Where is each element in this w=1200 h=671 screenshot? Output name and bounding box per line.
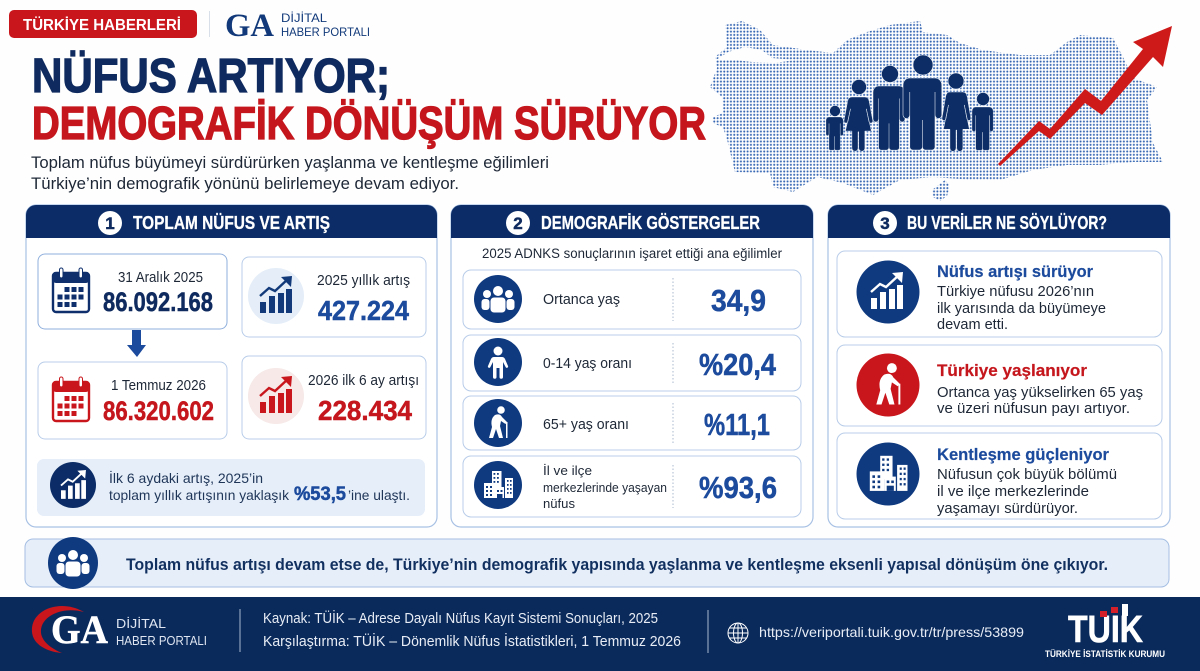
row: 0-14 age share: 0-14 yaş oranı — [543, 356, 632, 372]
card: Türkiye is ageing: Türkiye yaşlanıyor — [937, 361, 1087, 380]
footer GA logo: DİJİTAL — [116, 616, 166, 631]
footer GA logo: GA — [51, 607, 108, 652]
callout: share of annual growth: İlk 6 aydaki artış, 2025’in — [109, 469, 263, 486]
card: 2026 first six months growth: 2026 ilk 6 ay artışı — [308, 373, 419, 389]
category badge: TÜRKİYE HABERLERİ — [23, 15, 181, 34]
row: province and district centres: %93,6 — [699, 470, 777, 505]
card: 2025 annual growth: 2025 yıllık artış — [317, 273, 410, 289]
card: 2025 annual growth — [242, 257, 426, 337]
card: 31 Aralık 2025 population: 86.092.168 — [103, 287, 213, 317]
card: urbanisation strengthens — [837, 433, 1162, 519]
panel 2 heading: 2 — [513, 214, 523, 233]
callout: share of annual growth: toplam yıllık artışının yaklaşık — [109, 487, 290, 503]
card: 31 Aralık 2025 population — [38, 254, 227, 329]
row: median age — [463, 270, 801, 329]
source url: https://veriportali.tuik.gov.tr/tr/press/53899 — [759, 624, 1024, 640]
card: urbanisation strengthens: Kentleşme güçleniyor — [937, 445, 1109, 464]
card: 2026 first six months growth — [242, 356, 426, 439]
subtitle — [31, 153, 549, 193]
TÜİK logo: TÜİK — [1068, 608, 1143, 651]
dotted map of Türkiye — [710, 21, 1163, 201]
title — [32, 50, 706, 149]
subtitle: Türkiye’nin demografik yönünü belirlemeye devam ediyor. — [31, 174, 459, 193]
top brand bar — [9, 8, 370, 44]
panel: bu veriler ne söylüyor — [828, 205, 1170, 527]
panel 1 heading: 1 — [105, 214, 115, 233]
card: Türkiye is ageing: Ortanca yaş yükselirken 65 yaş — [937, 385, 1143, 401]
panel 2 subtitle: 2025 ADNKS sonuçlarının işaret ettiği ana eğilimler — [482, 246, 782, 261]
panel 1 heading: TOPLAM NÜFUS VE ARTIŞ — [133, 213, 330, 233]
title: DEMOGRAFİK DÖNÜŞÜM SÜRÜYOR — [32, 97, 706, 149]
card: 2026 first six months growth: 228.434 — [318, 395, 412, 426]
row: province and district centres: İl ve ilçe — [543, 463, 592, 478]
card: Türkiye is ageing: ve üzeri nüfusun payı artıyor. — [937, 401, 1130, 417]
card: urbanisation strengthens: yaşamayı sürdürüyor. — [937, 501, 1078, 517]
card: population growth continues: Türkiye nüfusu 2026’nın — [937, 284, 1094, 300]
callout: share of annual growth: ’ine ulaştı. — [348, 487, 410, 503]
row: province and district centres: merkezlerinde yaşayan — [543, 480, 667, 495]
panel: toplam nüfus ve artış — [26, 205, 437, 527]
source text — [263, 609, 681, 650]
icon: globe — [728, 623, 748, 643]
footer GA logo — [32, 606, 207, 653]
conclusion strip — [25, 537, 1169, 589]
icon: people — [48, 537, 98, 589]
GA logo: GA — [225, 8, 274, 44]
source text: Karşılaştırma: TÜİK – Dönemlik Nüfus İstatistikleri, 1 Temmuz 2026 — [263, 632, 681, 650]
panel 3 heading: 3 — [880, 214, 890, 233]
card: 2025 annual growth: 427.224 — [318, 295, 409, 326]
row: province and district centres — [463, 456, 801, 517]
row: median age: Ortanca yaş — [543, 292, 620, 308]
category badge — [9, 10, 197, 38]
card: population growth continues: ilk yarısında da büyümeye — [937, 301, 1106, 317]
card: population growth continues — [837, 251, 1162, 337]
hero illustration: dotted Türkiye map, family and rising arrow — [710, 21, 1172, 201]
panel 3 heading — [828, 205, 1170, 238]
card: population growth continues: devam etti. — [937, 317, 1008, 333]
card: Türkiye is ageing — [837, 345, 1162, 426]
TÜİK logo: TÜRKİYE İSTATİSTİK KURUMU — [1045, 649, 1165, 660]
conclusion text: Toplam nüfus artışı devam etse de, Türkiye’nin demografik yapısında yaşlanma ve kentleşme eksenli yapısal dönüşüm öne çıkıyor. — [126, 555, 1108, 574]
GA logo — [209, 8, 370, 44]
panel 2 heading — [451, 205, 813, 238]
card: urbanisation strengthens: Nüfusun çok büyük bölümü — [937, 467, 1117, 483]
card: 1 Temmuz 2026 population: 86.320.602 — [103, 396, 214, 426]
GA logo: DİJİTAL — [281, 11, 327, 25]
row: province and district centres: nüfus — [543, 496, 575, 511]
card: urbanisation strengthens: il ve ilçe merkezlerinde — [937, 484, 1089, 500]
TÜİK logo — [1045, 603, 1165, 660]
panel 2 heading: DEMOGRAFİK GÖSTERGELER — [541, 213, 760, 233]
panel 3 heading: BU VERİLER NE SÖYLÜYOR? — [907, 213, 1107, 233]
footer GA logo: HABER PORTALI — [116, 633, 207, 648]
row: 65+ age share: 65+ yaş oranı — [543, 417, 629, 433]
panel: demografik göstergeler — [451, 205, 813, 527]
subtitle: Toplam nüfus büyümeyi sürdürürken yaşlanma ve kentleşme eğilimleri — [31, 153, 549, 172]
arrow down — [127, 330, 146, 357]
panel 1 heading — [26, 205, 437, 238]
card: 31 Aralık 2025 population: 31 Aralık 2025 — [118, 270, 203, 286]
row: 0-14 age share: %20,4 — [699, 347, 777, 382]
family silhouettes — [826, 55, 993, 151]
title: NÜFUS ARTIYOR; — [32, 50, 390, 103]
card: 1 Temmuz 2026 population: 1 Temmuz 2026 — [111, 378, 206, 394]
row: median age: 34,9 — [711, 283, 766, 318]
rising red arrow — [998, 26, 1172, 166]
GA logo: HABER PORTALI — [281, 25, 370, 39]
footer — [0, 597, 1200, 671]
source text: Kaynak: TÜİK – Adrese Dayalı Nüfus Kayıt Sistemi Sonuçları, 2025 — [263, 609, 658, 627]
card: population growth continues: Nüfus artışı sürüyor — [937, 262, 1093, 281]
row: 0-14 age share — [463, 335, 801, 391]
card: 1 Temmuz 2026 population — [38, 362, 227, 439]
row: 65+ age share — [463, 396, 801, 450]
row: 65+ age share: %11,1 — [704, 407, 770, 442]
callout: share of annual growth — [37, 459, 425, 516]
callout: share of annual growth: %53,5 — [294, 484, 346, 505]
